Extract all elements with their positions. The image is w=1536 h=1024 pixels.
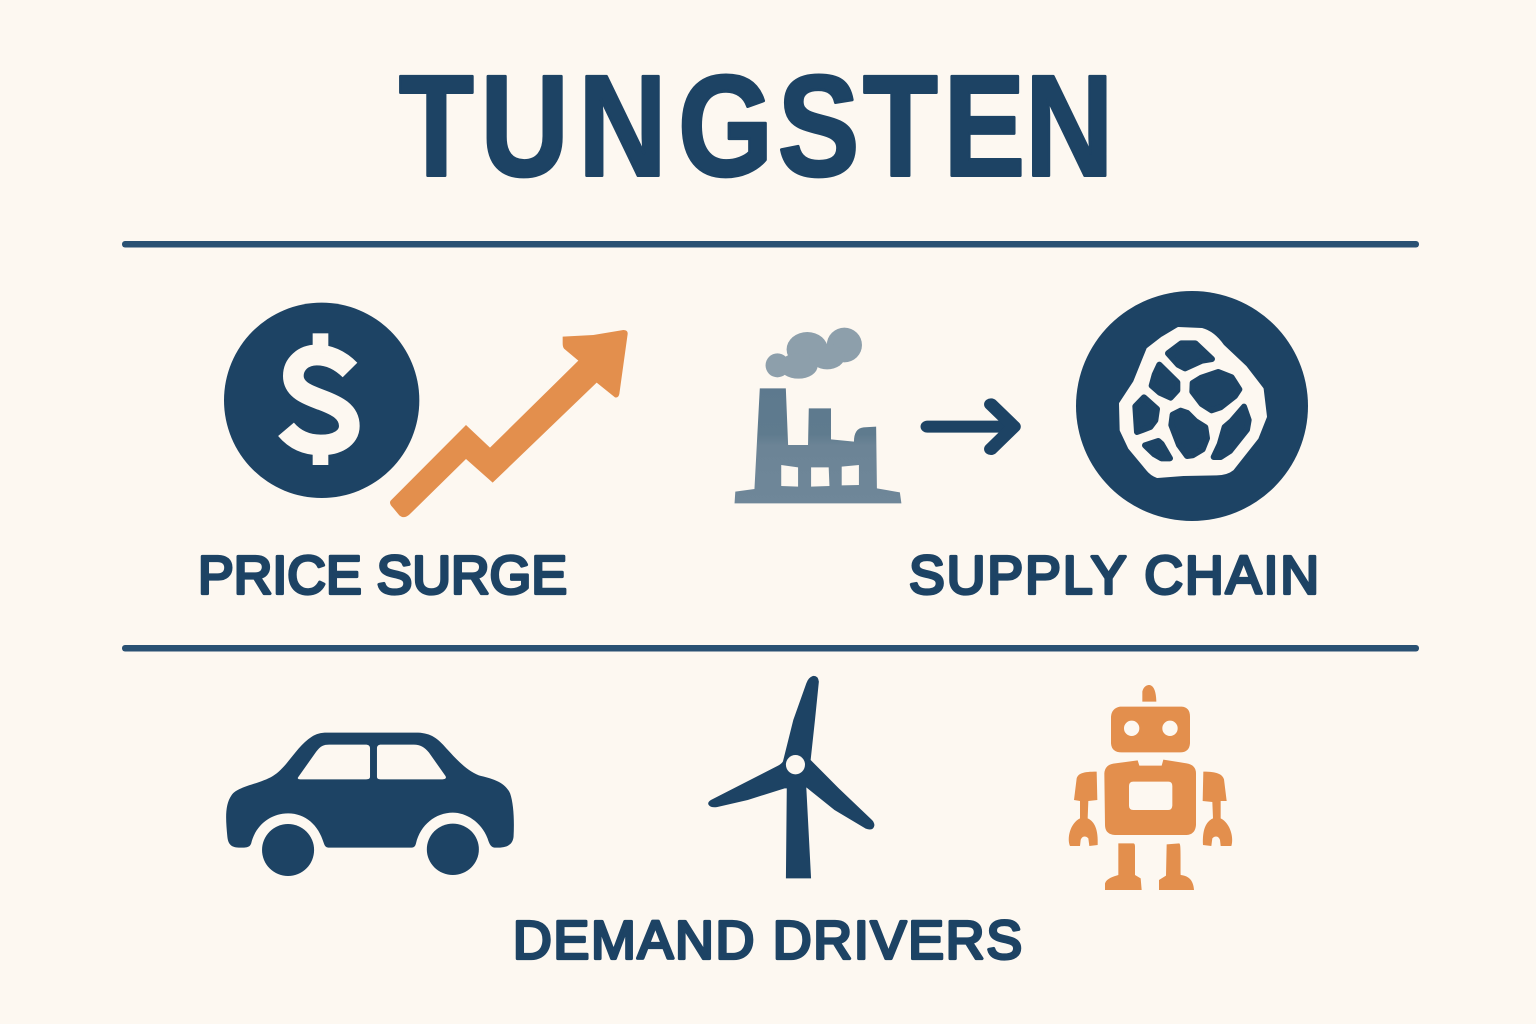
factory building xyxy=(735,388,901,503)
icon: right arrow xyxy=(927,404,1014,449)
label: price surge: PRICE SURGE xyxy=(198,546,567,605)
label: demand drivers: DEMAND DRIVERS xyxy=(513,911,1022,970)
icon: rising orange arrow xyxy=(390,330,628,517)
icon: robot xyxy=(1069,685,1232,890)
panel: demand drivers xyxy=(226,676,1232,970)
title: TUNGSTEN xyxy=(399,46,1113,207)
factory windows xyxy=(781,465,859,487)
panel: price surge xyxy=(198,303,628,605)
icon: car xyxy=(226,733,514,876)
icon: factory with smoke xyxy=(735,328,901,503)
icon: dollar coin xyxy=(224,303,419,498)
icon: tungsten ore coin xyxy=(1076,291,1308,521)
label: supply chain: SUPPLY CHAIN xyxy=(909,546,1319,605)
smoke cloud xyxy=(766,328,862,379)
icon: wind turbine xyxy=(708,676,874,878)
panel: supply chain xyxy=(735,291,1319,605)
